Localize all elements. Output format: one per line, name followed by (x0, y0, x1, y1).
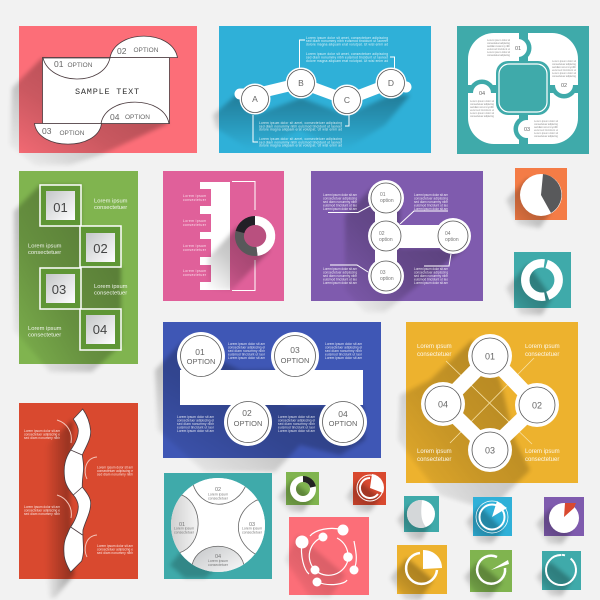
labels: consectetuer (183, 223, 207, 227)
captions: Lorem ipsum dolor sit am (414, 207, 448, 211)
captions: sed diam nonummy nibh (228, 349, 265, 353)
connectors (253, 40, 394, 142)
captions: sed diam nonummy nibh (278, 422, 315, 426)
captions: consectetuer adipiscing e (24, 508, 60, 512)
labels: Lorem ipsum (183, 269, 206, 273)
segment labels: 01 (179, 522, 185, 528)
circle 01 (177, 332, 225, 380)
captions: euismod tincidunt ut lao (323, 278, 357, 282)
text blocks: consectetuer adipiscing (470, 114, 494, 118)
text blocks: euismod tincidunt ut (470, 108, 494, 112)
icon: yellow ring wedge (390, 545, 447, 600)
option 01 tab: 01 (54, 59, 64, 69)
captions: sed diam nonummy nibh (177, 422, 214, 426)
text blocks: Lorem ipsum dolor sit (487, 50, 510, 54)
T connector (375, 198, 453, 276)
captions: Lorem ipsum dolor sit am (177, 415, 214, 419)
step labels: Lorem ipsum (94, 284, 128, 290)
captions: Lorem ipsum dolor sit am (278, 429, 315, 433)
ribbon seams (71, 450, 82, 535)
circle 03 (271, 332, 319, 380)
step 02: 02 (93, 241, 108, 256)
panel: four circle options (155, 322, 381, 472)
circle 02 (224, 398, 272, 446)
text blocks: Lorem ipsum dolor sit (534, 131, 558, 135)
panel: sample text (10, 26, 197, 165)
captions: dolore magna aliquam erat volutpat. Ut wisi enim ad (259, 128, 342, 132)
arcs (301, 528, 356, 585)
step 02 (80, 226, 121, 267)
text blocks: Lorem ipsum dolor sit (470, 111, 494, 115)
circle (171, 478, 265, 572)
captions: sed diam nonummy nibh (24, 436, 60, 440)
labels: consectetuer (183, 273, 207, 277)
zigzag band (240, 83, 406, 100)
captions: consectetuer adipiscing el (228, 346, 265, 350)
circle 02 (515, 383, 559, 427)
captions: Lorem ipsum dolor sit amet, consectetuer adipiscing (259, 121, 342, 125)
panel: comb and donut (163, 171, 284, 301)
option 01 (368, 180, 404, 216)
option 02: option (379, 237, 393, 243)
labels: consectetuer (417, 352, 451, 358)
labels: Lorem ipsum (525, 449, 560, 455)
captions: euismod tincidunt ut laor (325, 352, 363, 356)
text blocks: Lorem ipsum dolor sit (552, 71, 576, 75)
option 04 tab: OPTION (125, 114, 150, 121)
labels: 01 (515, 46, 521, 52)
text blocks: Lorem ipsum dolor sit (487, 38, 510, 42)
labels: Lorem ipsum (183, 219, 206, 223)
text blocks: consectetuer adipiscing (487, 53, 510, 57)
step 03 (40, 268, 81, 309)
circle 04 (319, 398, 367, 446)
text blocks: euismod tincidunt ut (534, 128, 558, 132)
text blocks: sed diam nonummy nibh (552, 65, 576, 69)
captions: Lorem ipsum dolor sit am (323, 193, 357, 197)
centre band (180, 370, 363, 405)
step labels (28, 198, 128, 338)
text blocks: sed diam nonummy nibh (487, 44, 510, 48)
captions: consectetuer adipiscing (323, 196, 357, 200)
captions: Lorem ipsum dolor sit am (97, 466, 133, 470)
step labels: consectetuer (94, 290, 127, 296)
option 03 tab: 03 (42, 126, 52, 136)
captions: sed diam nonummy nibh euismod tincidunt ut laoreet (306, 39, 388, 43)
comb (200, 182, 230, 290)
option 03 (368, 258, 404, 294)
captions: dolore magna aliquam erat volutpat. Ut wisi enim ad (259, 144, 342, 148)
step 03: 03 (52, 282, 66, 297)
option 01: option (380, 198, 394, 204)
captions: euismod tincidunt ut laor (228, 352, 266, 356)
option 01 tab: OPTION (68, 62, 93, 69)
white puzzle base (468, 33, 578, 144)
text blocks: Lorem ipsum dolor sit (470, 99, 494, 103)
arcs (57, 420, 97, 557)
captions: consectetuer adipiscing el (325, 346, 362, 350)
circle 02: 02 (242, 408, 252, 418)
icon: teal split ring (506, 252, 571, 315)
circle 01: 01 (195, 347, 205, 357)
captions (24, 429, 133, 555)
captions: Lorem ipsum dolor sit am (325, 356, 362, 360)
segments (171, 478, 265, 572)
circle D (376, 68, 406, 98)
captions: Lorem ipsum dolor sit amet, consectetuer adipiscing (306, 36, 388, 40)
option 02: 02 (379, 231, 385, 237)
captions: sed diam nonummy nibh (414, 200, 448, 204)
segment labels (174, 487, 263, 567)
captions: sed diam nonummy nibh (323, 274, 357, 278)
option 01: 01 (380, 192, 386, 198)
option 03: option (380, 276, 394, 282)
captions: sed diam nonummy nibh (323, 200, 357, 204)
captions: Lorem ipsum dolor sit am (414, 267, 448, 271)
icon: green donut (278, 472, 319, 512)
panel: puzzle square (457, 26, 589, 154)
labels: consectetuer (183, 248, 207, 252)
captions: sed diam nonummy nibh (97, 551, 133, 555)
text blocks: consectetuer adipiscing (534, 134, 558, 138)
captions (323, 193, 448, 285)
segment labels: consectetuer (208, 496, 229, 500)
heading: SAMPLE TEXT (75, 87, 140, 97)
captions: sed diam nonummy nibh euismod tincidunt ut laoreet (259, 124, 342, 128)
labels: consectetuer (417, 457, 451, 463)
panel: diamond of circles (398, 322, 578, 510)
donut (239, 220, 271, 252)
captions: dolore magna aliquam erat volutpat. Ut wisi enim ad (306, 59, 388, 63)
circle 03: OPTION (281, 356, 309, 365)
step labels: Lorem ipsum (28, 326, 62, 332)
captions: consectetuer adipiscing (414, 270, 448, 274)
captions (177, 342, 363, 433)
icon: green ring wedge (464, 550, 512, 598)
captions: euismod tincidunt ut lao (414, 204, 448, 208)
captions: sed diam nonummy nibh (97, 472, 133, 476)
step labels: consectetuer (28, 332, 61, 338)
captions: sed diam nonummy nibh (414, 274, 448, 278)
panel: pink orbit dots (285, 517, 369, 597)
diamond band (443, 356, 537, 450)
captions (259, 36, 388, 148)
text blocks: consectetuer adipiscing (552, 74, 576, 78)
labels (183, 194, 207, 277)
segment labels: Lorem ipsum (174, 526, 194, 530)
captions: Lorem ipsum dolor sit am (228, 342, 265, 346)
segment labels: 03 (249, 522, 255, 528)
crossing lines (446, 358, 534, 444)
circle A: A (252, 94, 258, 104)
ribbon (64, 409, 91, 572)
captions: dolore magna aliquam erat volutpat. Ut wisi enim ad (306, 42, 388, 46)
labels: Lorem ipsum (417, 344, 452, 350)
option 02 tab: 02 (117, 46, 127, 56)
labels: consectetuer (525, 352, 559, 358)
step 04: 04 (93, 322, 107, 337)
circle 03: 03 (290, 345, 300, 355)
circle 02: OPTION (234, 419, 262, 428)
text blocks: sed diam nonummy nibh (534, 125, 558, 129)
labels: 02 (561, 83, 567, 89)
captions: sed diam nonummy nibh euismod tincidunt ut laoreet (306, 56, 388, 60)
circle B: B (298, 78, 304, 88)
captions: Lorem ipsum dolor sit am (414, 281, 448, 285)
step labels: Lorem ipsum (28, 244, 62, 250)
captions: euismod tincidunt ut lao (414, 278, 448, 282)
step labels: consectetuer (28, 250, 61, 256)
labels (417, 344, 560, 463)
option 03: 03 (380, 270, 386, 276)
bracket (232, 182, 255, 290)
segment labels: 02 (215, 487, 221, 493)
circle 03: 03 (485, 446, 495, 456)
captions: Lorem ipsum dolor sit am (323, 281, 357, 285)
labels: Lorem ipsum (525, 344, 560, 350)
captions: Lorem ipsum dolor sit am (228, 356, 265, 360)
text blocks: Lorem ipsum dolor sit (534, 119, 558, 123)
captions: consectetuer adipiscing el (278, 418, 315, 422)
step 01 (40, 185, 81, 226)
option 03 tab (34, 124, 102, 144)
circle 04: OPTION (329, 419, 357, 428)
captions: consectetuer adipiscing e (24, 432, 60, 436)
captions: consectetuer adipiscing el (177, 418, 214, 422)
option 02 (368, 218, 404, 254)
option 02 tab (110, 36, 178, 58)
circle 02: 02 (532, 400, 542, 410)
circle 04: 04 (438, 400, 448, 410)
captions: Lorem ipsum dolor sit am (24, 429, 60, 433)
panel: T-shaped options (311, 171, 483, 312)
option 04 tab: 04 (110, 112, 120, 122)
icon: teal open ring (536, 549, 582, 596)
option 04 (435, 218, 471, 254)
panel: ABCD timeline (213, 26, 431, 153)
captions: sed diam nonummy nibh (24, 512, 60, 516)
captions: Lorem ipsum dolor sit am (97, 544, 133, 548)
circle C (332, 84, 362, 116)
circle 04 (421, 382, 465, 426)
captions: consectetuer adipiscing e (97, 548, 133, 552)
tab fills (468, 33, 578, 144)
circle 01: OPTION (187, 357, 215, 366)
circle C: C (344, 95, 350, 105)
captions: Lorem ipsum dolor sit am (278, 415, 315, 419)
option 04: option (445, 237, 459, 243)
circle A (240, 84, 270, 114)
circle D: D (388, 78, 394, 88)
icon: red dial (346, 472, 386, 512)
text blocks: Lorem ipsum dolor sit (552, 59, 576, 63)
captions: Lorem ipsum dolor sit am (325, 342, 362, 346)
captions: consectetuer adipiscing e (97, 469, 133, 473)
text blocks: consectetuer adipiscing (534, 122, 558, 126)
option 04 tab (101, 102, 169, 124)
circle B (286, 68, 316, 98)
text blocks (470, 38, 576, 138)
text blocks: consectetuer adipiscing (552, 62, 576, 66)
centre square (496, 61, 550, 115)
segment labels: consectetuer (242, 530, 263, 534)
option 03 tab: OPTION (60, 130, 85, 137)
option 02 tab: OPTION (134, 47, 159, 54)
captions: euismod tincidunt ut lao (323, 204, 357, 208)
circle 04: 04 (338, 409, 348, 419)
labels: 04 (479, 91, 485, 97)
gaps and tabs (468, 33, 578, 144)
text blocks: consectetuer adipiscing (487, 41, 510, 45)
leader lines (328, 206, 451, 272)
panel: numbered steps (14, 171, 138, 372)
labels: consectetuer (525, 457, 559, 463)
panel: segmented circle (164, 470, 275, 580)
captions: euismod tincidunt ut laor (278, 426, 316, 430)
sample text card (42, 58, 170, 124)
segment labels: Lorem ipsum (242, 526, 262, 530)
captions: consectetuer adipiscing (323, 270, 357, 274)
panel: wave ribbon (19, 403, 138, 598)
option 01 tab (43, 58, 110, 79)
icon: purple pie (536, 497, 584, 544)
text blocks: sed diam nonummy nibh (470, 105, 494, 109)
icon: orange pie (506, 168, 567, 228)
text blocks: euismod tincidunt ut (487, 47, 510, 51)
icon: blue ring wedge (466, 497, 512, 543)
step labels: consectetuer (94, 205, 127, 211)
captions: Lorem ipsum dolor sit am (323, 267, 357, 271)
circle 01 (468, 334, 512, 378)
labels: Lorem ipsum (417, 449, 452, 455)
captions: Lorem ipsum dolor sit am (177, 429, 214, 433)
step labels: Lorem ipsum (94, 198, 128, 204)
labels (479, 46, 567, 133)
step 04 (80, 309, 121, 350)
captions: Lorem ipsum dolor sit am (323, 207, 357, 211)
text blocks: consectetuer adipiscing (470, 102, 494, 106)
captions: euismod tincidunt ut laor (177, 426, 215, 430)
icon: teal half pie (397, 496, 439, 540)
captions: Lorem ipsum dolor sit amet, consectetuer adipiscing (259, 137, 342, 141)
step 01: 01 (53, 200, 68, 215)
labels: Lorem ipsum (183, 244, 206, 248)
segment labels: Lorem ipsum (208, 492, 228, 496)
captions: sed diam nonummy nibh euismod tincidunt ut laoreet (259, 140, 342, 144)
labels: 03 (524, 127, 530, 133)
segment labels: Lorem ipsum (208, 559, 228, 563)
captions: sed diam nonummy nibh (325, 349, 362, 353)
text blocks: euismod tincidunt ut (552, 68, 576, 72)
segment labels: consectetuer (174, 530, 195, 534)
segment labels: 04 (215, 554, 221, 560)
labels: Lorem ipsum (183, 194, 206, 198)
option 04: 04 (445, 231, 451, 237)
captions: consectetuer adipiscing (414, 196, 448, 200)
captions: Lorem ipsum dolor sit amet, consectetuer adipiscing (306, 52, 388, 56)
captions: Lorem ipsum dolor sit am (24, 505, 60, 509)
captions: Lorem ipsum dolor sit am (414, 193, 448, 197)
labels: consectetuer (183, 198, 207, 202)
circle 03 (468, 428, 512, 472)
circle 01: 01 (485, 352, 495, 362)
dots (296, 524, 358, 586)
segment labels: consectetuer (208, 563, 229, 567)
